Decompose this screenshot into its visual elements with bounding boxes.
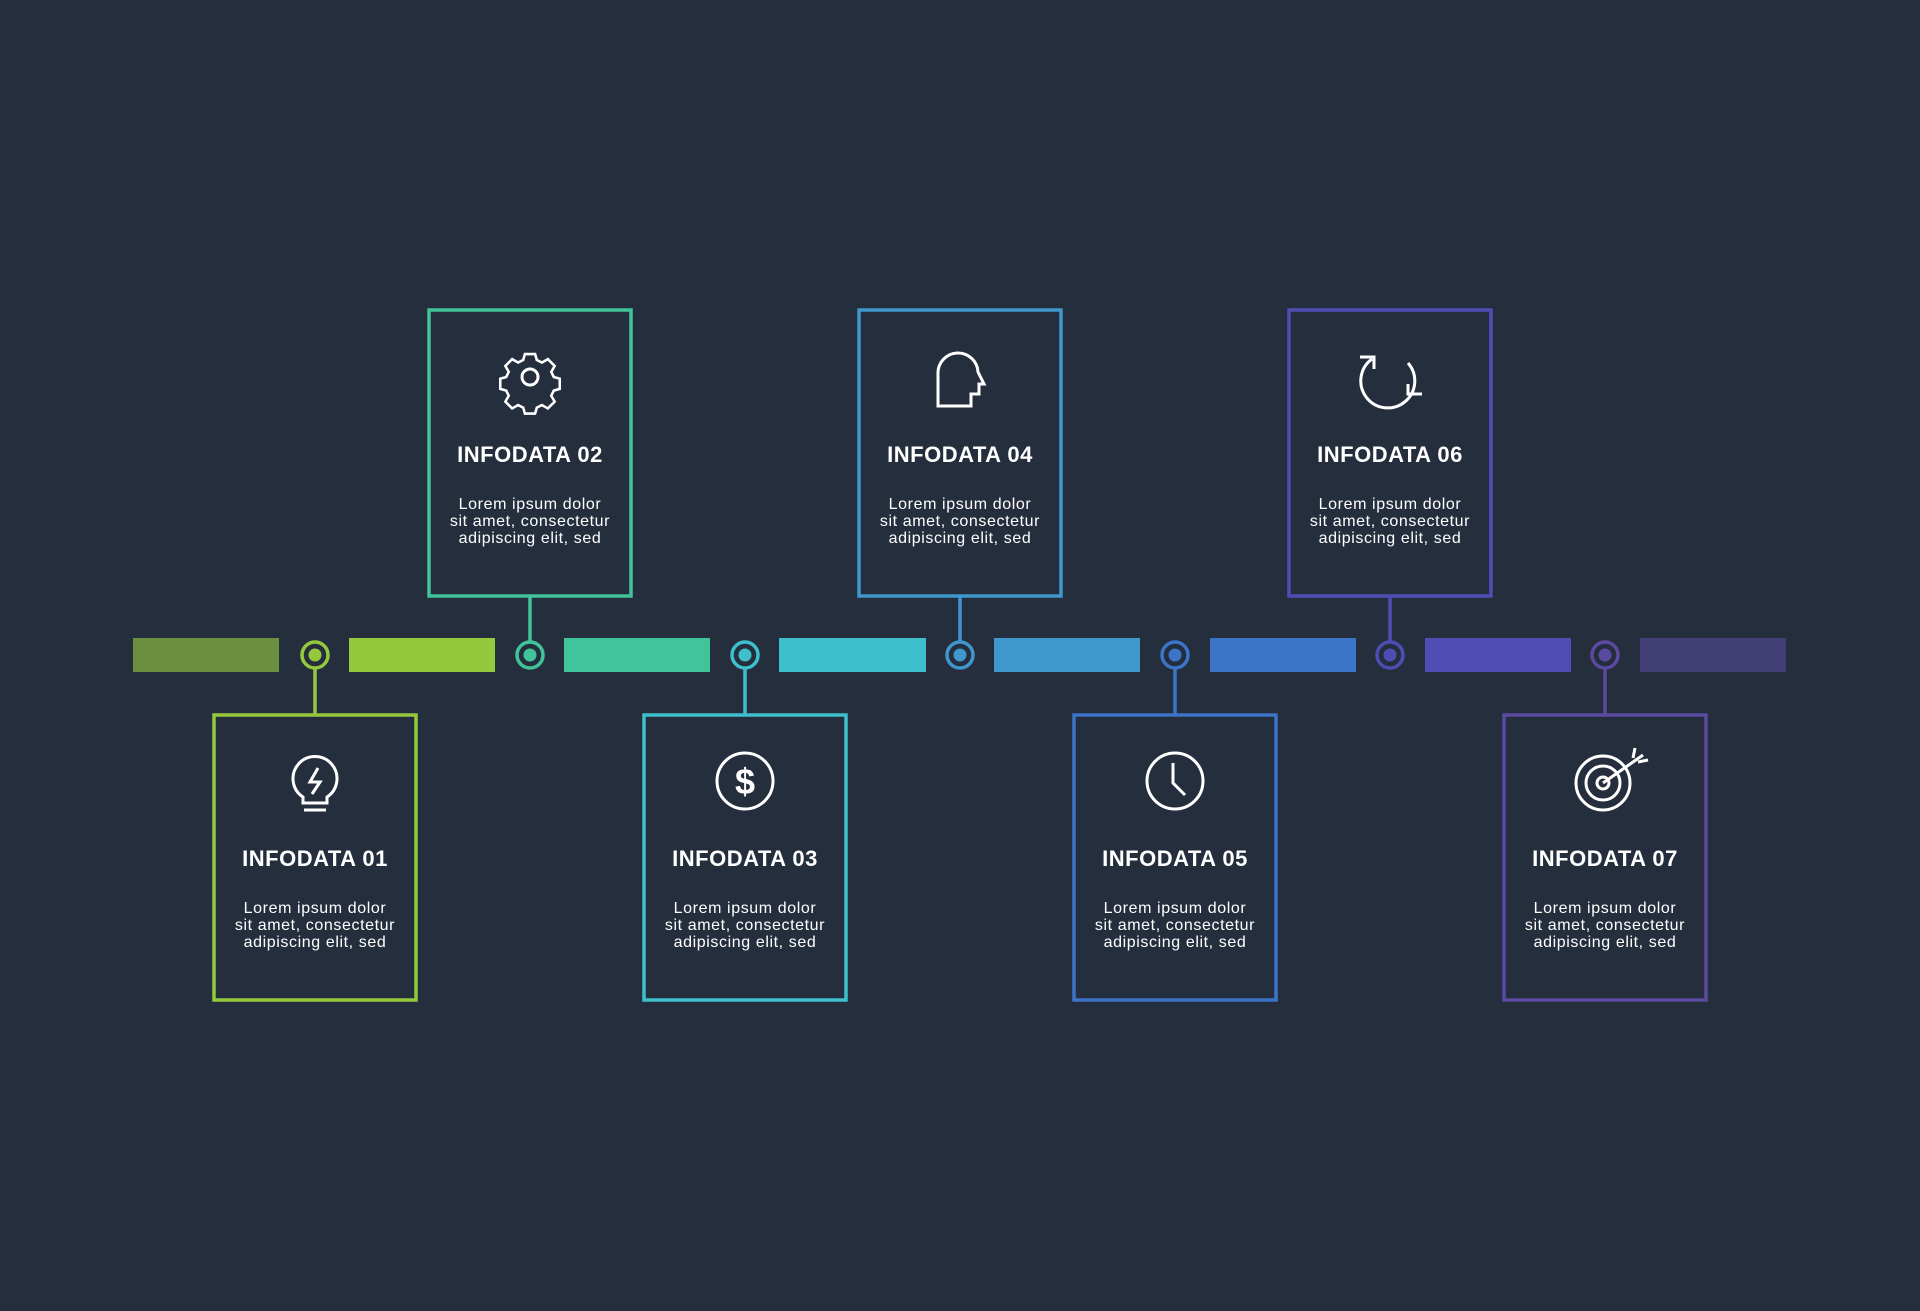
text 05: INFODATA 05 [1102,846,1248,871]
icon: lightbulb [293,757,337,810]
text 06 [1310,442,1470,547]
text 07 [1525,846,1685,951]
text 07: adipiscing elit, sed [1534,934,1676,951]
text 04: sit amet, consectetur [880,513,1040,530]
text 05: sit amet, consectetur [1095,917,1255,934]
text 03: sit amet, consectetur [665,917,825,934]
text 02 [450,442,610,547]
text 04 [880,442,1040,547]
text 03: adipiscing elit, sed [674,934,816,951]
text 07: Lorem ipsum dolor [1534,900,1676,917]
timeline bars [133,638,1786,672]
text 03: Lorem ipsum dolor [674,900,816,917]
step 05 [1074,642,1276,1000]
icon: gear [500,354,560,414]
text 04: INFODATA 04 [887,442,1033,467]
text 07: sit amet, consectetur [1525,917,1685,934]
text 05: adipiscing elit, sed [1104,934,1246,951]
text 06: INFODATA 06 [1317,442,1463,467]
text 02: INFODATA 02 [457,442,603,467]
text 01: adipiscing elit, sed [244,934,386,951]
icon: dollar [717,753,773,809]
text 05 [1095,846,1255,951]
icon: dollar: $ [735,761,755,802]
text 06: Lorem ipsum dolor [1319,496,1461,513]
step 07 [1504,642,1706,1000]
text 01: INFODATA 01 [242,846,388,871]
text 02: Lorem ipsum dolor [459,496,601,513]
text 04: adipiscing elit, sed [889,530,1031,547]
text 02: sit amet, consectetur [450,513,610,530]
text 01: sit amet, consectetur [235,917,395,934]
text 06: adipiscing elit, sed [1319,530,1461,547]
icon: refresh [1360,357,1422,408]
icon: target [1576,748,1648,810]
text 07: INFODATA 07 [1532,846,1678,871]
text 01 [235,846,395,951]
text 06: sit amet, consectetur [1310,513,1470,530]
step 03 [644,642,846,1000]
icon: head [938,353,984,406]
icon: clock [1147,753,1203,809]
text 01: Lorem ipsum dolor [244,900,386,917]
step 02 [429,310,631,668]
text 03: INFODATA 03 [672,846,818,871]
step 01 [214,642,416,1000]
text 05: Lorem ipsum dolor [1104,900,1246,917]
text 02: adipiscing elit, sed [459,530,601,547]
step 06 [1289,310,1491,668]
text 04: Lorem ipsum dolor [889,496,1031,513]
step 04 [859,310,1061,668]
text 03 [665,846,825,951]
